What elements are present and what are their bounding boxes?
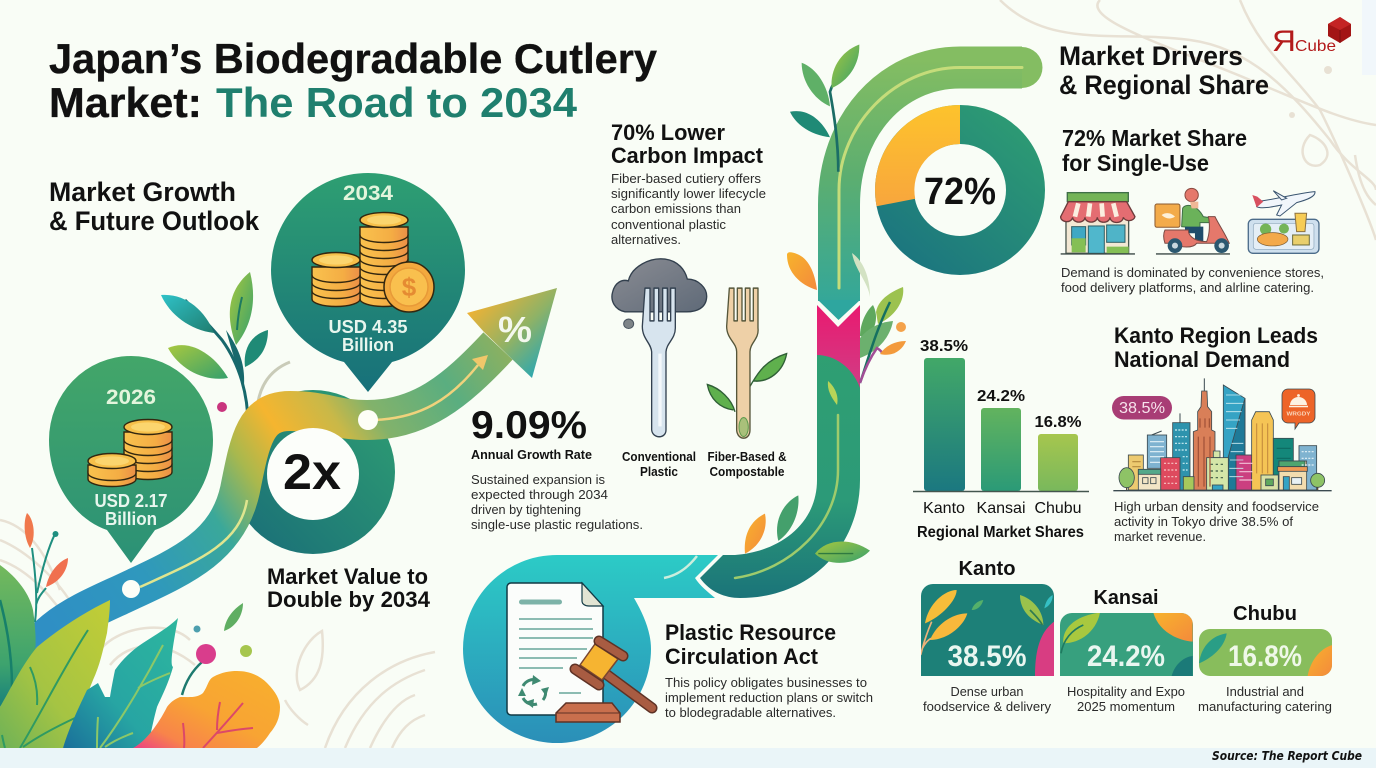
text: plastic resource circulation act: This policy obligates businesses to bbox=[665, 676, 867, 690]
text: market value to double: Double by 2034 bbox=[267, 587, 431, 612]
title: Market: bbox=[49, 79, 202, 126]
bar: Chubu: Chubu bbox=[1034, 500, 1082, 517]
label: conventional plastic bbox=[622, 450, 696, 479]
title: The Road to 2034 bbox=[216, 79, 578, 126]
bar: Kanto: Kanto bbox=[923, 500, 965, 517]
heading: market drivers: & Regional Share bbox=[1059, 70, 1269, 100]
heading: market drivers bbox=[1059, 41, 1269, 100]
icon: vine leaves on road bbox=[745, 45, 870, 563]
heading: market growth: & Future Outlook bbox=[49, 206, 260, 236]
icon: policy document bbox=[507, 583, 603, 715]
icon: fiber-based fork with leaves bbox=[707, 288, 787, 438]
text: carbon impact bbox=[611, 120, 766, 247]
text: carbon impact: alternatives. bbox=[611, 233, 681, 247]
callout: 2026 bubble: Billion bbox=[105, 509, 157, 529]
text: urban density: market revenue. bbox=[1114, 530, 1206, 544]
text: carbon impact: significantly lower lifecycle bbox=[611, 187, 766, 201]
label: fiber-based and compostable bbox=[708, 450, 786, 479]
text: carbon impact: carbon emissions than bbox=[611, 202, 741, 216]
title bbox=[49, 35, 658, 126]
text: Chubu note: manufacturing catering bbox=[1198, 700, 1332, 714]
callout: 2x bbox=[267, 428, 359, 520]
text: annual growth rate bbox=[471, 404, 643, 532]
text: carbon impact: Fiber-based cutiery offers bbox=[611, 172, 761, 186]
text: carbon impact: conventional plastic bbox=[611, 218, 726, 232]
text: 72 percent share bbox=[1062, 125, 1247, 176]
logo: Я bbox=[1272, 25, 1296, 58]
road: growth curve bbox=[20, 288, 557, 690]
bar: Kansai: 24.2% bbox=[977, 388, 1025, 405]
text: market value to double: Market Value to bbox=[267, 564, 428, 589]
text: plastic resource circulation act: Circulation Act bbox=[665, 644, 819, 669]
heading: market growth bbox=[49, 177, 260, 236]
footer band bbox=[0, 748, 1376, 768]
panel: Kanto card bbox=[921, 558, 1054, 676]
text: 72 percent share: 72% Market Share bbox=[1062, 125, 1247, 151]
bar: Kanto bbox=[920, 338, 968, 517]
text: Kansai note: 2025 momentum bbox=[1077, 700, 1175, 714]
road: pink chevron bbox=[817, 305, 860, 392]
text: Chubu note bbox=[1198, 685, 1332, 714]
callout: 2034 bubble bbox=[271, 173, 465, 392]
callout: 2034 bubble: Billion bbox=[342, 335, 394, 355]
panel: Kansai card: 24.2% bbox=[1087, 640, 1165, 673]
text: Kansai note bbox=[1067, 685, 1185, 714]
text: annual growth rate: 9.09% bbox=[471, 404, 587, 447]
icon: coins 2034: $ bbox=[402, 272, 417, 302]
source line: Source: The Report Cube bbox=[1212, 749, 1362, 763]
road: teal policy section with circle bbox=[463, 555, 718, 743]
panel: Kanto card: 38.5% bbox=[948, 640, 1026, 673]
text: Kansai note: Hospitality and Expo bbox=[1067, 685, 1185, 699]
text: plastic resource circulation act: to blodegradable alternatives. bbox=[665, 706, 836, 720]
text: market value to double bbox=[267, 564, 431, 612]
label: conventional plastic: Plastic bbox=[640, 465, 678, 479]
text: plastic resource circulation act bbox=[665, 620, 873, 720]
text: urban density: High urban density and foodservice bbox=[1114, 500, 1319, 514]
text: Kanto note: Dense urban bbox=[950, 685, 1024, 699]
logo bbox=[1272, 17, 1351, 58]
callout: 38.5 percent pill bbox=[1112, 396, 1172, 420]
icon: plant beside pink chevron bbox=[787, 252, 906, 383]
icon: convenience store bbox=[1061, 193, 1135, 254]
dot: 2026 marker bbox=[122, 580, 140, 598]
chart: regional market shares bars bbox=[913, 338, 1089, 541]
icon: lower-left foliage bbox=[0, 513, 280, 748]
icon: plant above road bbox=[161, 272, 290, 425]
text: carbon impact: 70% Lower bbox=[611, 120, 725, 145]
icon: coins 2026 bbox=[88, 420, 172, 486]
road: drivers curve top bbox=[818, 47, 1042, 320]
text: Kanto note: foodservice & delivery bbox=[923, 700, 1052, 714]
text: 72 percent share: for Single-Use bbox=[1062, 150, 1209, 176]
panel: Kansai card bbox=[1060, 587, 1193, 676]
text: annual growth rate: Annual Growth Rate bbox=[471, 448, 592, 462]
text: plastic resource circulation act: implement reduction plans or switch bbox=[665, 691, 873, 705]
callout: 2026 bubble bbox=[49, 356, 213, 563]
bar: Chubu: 16.8% bbox=[1034, 414, 1082, 431]
chart: 72 percent donut: 72% bbox=[924, 171, 996, 213]
panel: Chubu card bbox=[1199, 603, 1332, 676]
icon: restaurant bell bubble bbox=[1282, 389, 1315, 429]
label: conventional plastic: Conventional bbox=[622, 450, 696, 464]
icon: conventional plastic fork with cloud bbox=[612, 259, 707, 437]
label: fiber-based and compostable: Fiber-Based & bbox=[708, 450, 786, 464]
text: Chubu note: Industrial and bbox=[1226, 685, 1304, 699]
heading: Kanto region leads bbox=[1114, 323, 1318, 372]
text: annual growth rate: expected through 2034 bbox=[471, 488, 608, 502]
callout: 2034 bubble: USD 4.35 bbox=[328, 317, 408, 337]
callout: 2026 bubble: USD 2.17 bbox=[94, 491, 168, 511]
text: carbon impact: Carbon Impact bbox=[611, 143, 764, 168]
icon: delivery scooter bbox=[1155, 188, 1230, 254]
callout: 38.5 percent pill: 38.5% bbox=[1119, 400, 1165, 417]
text: urban density bbox=[1114, 500, 1319, 544]
dot: 2034 marker bbox=[358, 410, 378, 430]
text: annual growth rate: single-use plastic regulations. bbox=[471, 518, 643, 532]
text: demand dominated by: Demand is dominated by convenience stores, bbox=[1061, 266, 1324, 280]
logo: Cube bbox=[1295, 38, 1336, 55]
road: green lower section bbox=[700, 355, 860, 598]
icon: restaurant bell bubble: WRGDY bbox=[1286, 412, 1311, 418]
icon: coins 2034 bbox=[312, 212, 434, 312]
bar: Kansai: Kansai bbox=[976, 500, 1026, 517]
callout: 2034 bubble: 2034 bbox=[343, 182, 393, 205]
text: plastic resource circulation act: Plastic Resource bbox=[665, 620, 836, 645]
heading: market drivers: Market Drivers bbox=[1059, 41, 1243, 71]
label: fiber-based and compostable: Compostable bbox=[710, 465, 785, 479]
heading: Kanto region leads: National Demand bbox=[1114, 347, 1290, 372]
panel: Kansai card: Kansai bbox=[1094, 587, 1158, 609]
panel: Chubu card: 16.8% bbox=[1228, 640, 1302, 673]
text: annual growth rate: Sustained expansion is bbox=[471, 473, 605, 487]
icon: 2x ring behind road bbox=[231, 390, 395, 554]
heading: Kanto region leads: Kanto Region Leads bbox=[1114, 323, 1318, 348]
bar: Kanto: 38.5% bbox=[920, 338, 968, 355]
text: annual growth rate: driven by tightening bbox=[471, 503, 581, 517]
panel: Kanto card: Kanto bbox=[958, 558, 1016, 580]
icon: gavel bbox=[556, 641, 652, 722]
callout: 2x: 2x bbox=[283, 444, 341, 500]
bar: Chubu bbox=[1034, 414, 1082, 517]
icon: percent sign on arrow: % bbox=[498, 309, 532, 350]
icon: airline catering tray bbox=[1248, 191, 1319, 253]
text: demand dominated by: food delivery platforms, and alrline catering. bbox=[1061, 281, 1314, 295]
chart: 72 percent donut bbox=[875, 105, 1026, 256]
title: Japan’s Biodegradable Cutlery bbox=[49, 35, 658, 82]
text: urban density: activity in Tokyo drive 38.5% of bbox=[1114, 515, 1294, 529]
text: demand dominated by bbox=[1061, 266, 1324, 295]
icon: city skyline bbox=[1113, 378, 1332, 491]
text: Kanto note bbox=[923, 685, 1052, 714]
callout: 2026 bubble: 2026 bbox=[106, 386, 156, 409]
chart: regional market shares bars: Regional Market Shares bbox=[917, 524, 1084, 541]
bar: Kansai bbox=[976, 388, 1026, 517]
heading: market growth: Market Growth bbox=[49, 177, 236, 207]
panel: Chubu card: Chubu bbox=[1233, 603, 1297, 625]
